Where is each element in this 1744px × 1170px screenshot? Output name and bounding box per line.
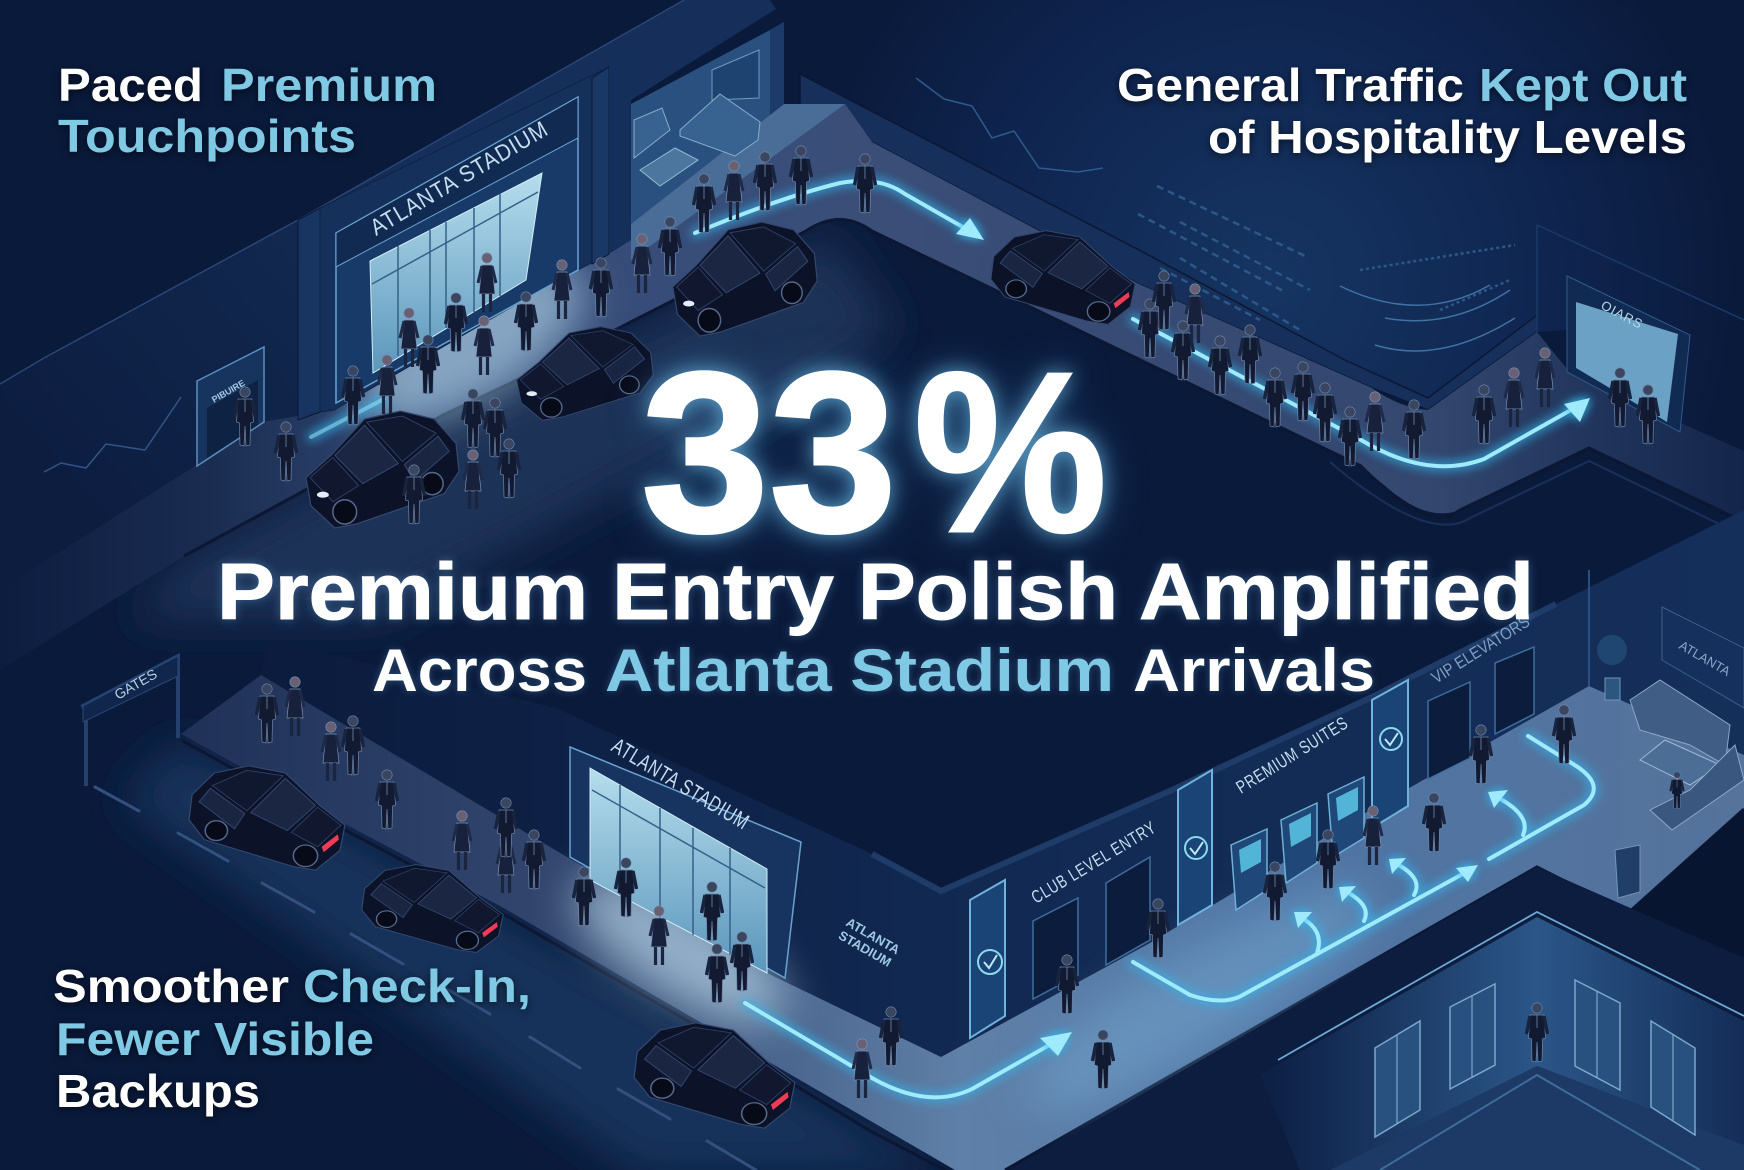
- kiosks: [1231, 777, 1364, 910]
- VIP elevators: [1428, 647, 1534, 779]
- waste bin: [1615, 845, 1640, 898]
- car: sedan: [517, 327, 653, 420]
- glass doors: [370, 173, 542, 373]
- VIP sign: VIP ELEVATORS: [1428, 612, 1533, 687]
- check panel 1: [970, 880, 1005, 1038]
- lobby sign: ATLANTA: [1676, 638, 1733, 679]
- heading: bottom-left callout: Check-In,: [303, 960, 531, 1012]
- icon: trend line on wall: [44, 397, 181, 472]
- panel: upper-right hospitality wall: [770, 0, 1744, 451]
- crowd of people: [234, 146, 1684, 1098]
- panel: upper walkway: [0, 104, 1744, 670]
- subtitle: Arrivals: [1133, 637, 1375, 704]
- car: SUV upper right of row: [673, 222, 817, 336]
- lobby sign: [1662, 607, 1744, 708]
- heading: top-right callout: General Traffic: [1117, 59, 1464, 111]
- elevator centre seams: [1397, 991, 1673, 1124]
- gate sign: GATES: [112, 666, 160, 703]
- route arrow lower left: [745, 1003, 1072, 1097]
- subtitle: Atlanta Stadium: [605, 637, 1114, 704]
- panel: upper road: [130, 232, 900, 620]
- door sign: PIBUIRE: [210, 378, 247, 405]
- check panel 3: [1372, 680, 1408, 828]
- vehicles: [189, 222, 1135, 1128]
- car: SUV front: [306, 411, 459, 528]
- panel: upper-left building wall: [0, 0, 790, 600]
- panel: lower gate: [83, 656, 178, 786]
- arrowheads: [1294, 790, 1508, 928]
- car: lower sedan: [362, 865, 503, 952]
- panel: club level and suites wall: [970, 612, 1534, 1038]
- road lane dashes: [95, 787, 756, 1170]
- heading: top-right callout: of Hospitality Levels: [1208, 111, 1687, 163]
- panel: storefront Atlanta Stadium lower: [570, 733, 903, 978]
- glass doors: [590, 768, 767, 973]
- sign band: [336, 97, 578, 267]
- panel: lower wall: [261, 510, 1744, 1057]
- lounge sofas: [680, 94, 760, 156]
- logo on wall: [836, 915, 903, 971]
- route arrow upper left: [311, 181, 984, 437]
- panel: lower road: [95, 740, 955, 1170]
- panel: dark corner wedge: [1628, 809, 1744, 958]
- car: bottom sedan: [634, 1023, 795, 1128]
- trend line on hospitality wall: [916, 78, 1103, 172]
- logo on wall: ATLANTA: [844, 915, 903, 958]
- sign text: ATLANTA STADIUM: [365, 115, 553, 240]
- panel: upper lounge: [609, 22, 845, 260]
- panel: lower walkway: [181, 675, 1744, 1170]
- heading: top-left callout: Paced: [58, 59, 203, 111]
- heading: top-right callout: Kept Out: [1479, 59, 1687, 111]
- car: sedan on hospitality lane: [991, 231, 1135, 324]
- panel: lower elevator room: [1010, 867, 1744, 1170]
- elevator doors: [1375, 980, 1695, 1137]
- faint wall data marks: [1138, 186, 1515, 330]
- subtitle: Across: [372, 637, 587, 704]
- club sign: CLUB LEVEL ENTRY: [1028, 817, 1160, 907]
- big stat: %: [914, 326, 1107, 580]
- logo on wall: STADIUM: [836, 928, 894, 970]
- sign text: ATLANTA STADIUM: [607, 733, 754, 835]
- arrowhead: [1040, 1032, 1072, 1056]
- arrowhead: [1564, 398, 1590, 422]
- lounge TV: [712, 50, 759, 100]
- check panel 2: [1178, 770, 1212, 925]
- lobby sofas: [1630, 680, 1730, 765]
- lounge plant: [1597, 635, 1627, 700]
- heading: bottom-left callout: Smoother: [53, 960, 289, 1012]
- route arrow upper right: [1133, 319, 1590, 466]
- big stat: 33: [641, 326, 897, 580]
- suites sign: PREMIUM SUITES: [1233, 713, 1352, 797]
- car: lower SUV: [189, 766, 345, 870]
- door sign: OIARS: [1599, 297, 1646, 332]
- arrowhead: [956, 218, 984, 240]
- panel: lower lounge: [1597, 607, 1744, 898]
- light spill on lower walkway: [554, 850, 806, 1050]
- main title: Premium Entry Polish Amplified: [217, 547, 1534, 636]
- panel: door to hospitality: [1567, 276, 1690, 432]
- light spill on walkway: [330, 230, 610, 460]
- panel: storefront Atlanta Stadium upper: [298, 67, 609, 420]
- heading: bottom-left callout: Backups: [56, 1065, 260, 1117]
- heading: bottom-left callout: Fewer Visible: [56, 1013, 374, 1065]
- lounge table: [640, 148, 698, 186]
- heading: top-left callout: Touchpoints: [58, 110, 356, 162]
- heading: top-left callout: Premium: [221, 59, 437, 111]
- club entry doors: [1033, 857, 1150, 999]
- route arrow lower right with branches: [1133, 736, 1594, 1001]
- panel: small side door: [197, 347, 264, 466]
